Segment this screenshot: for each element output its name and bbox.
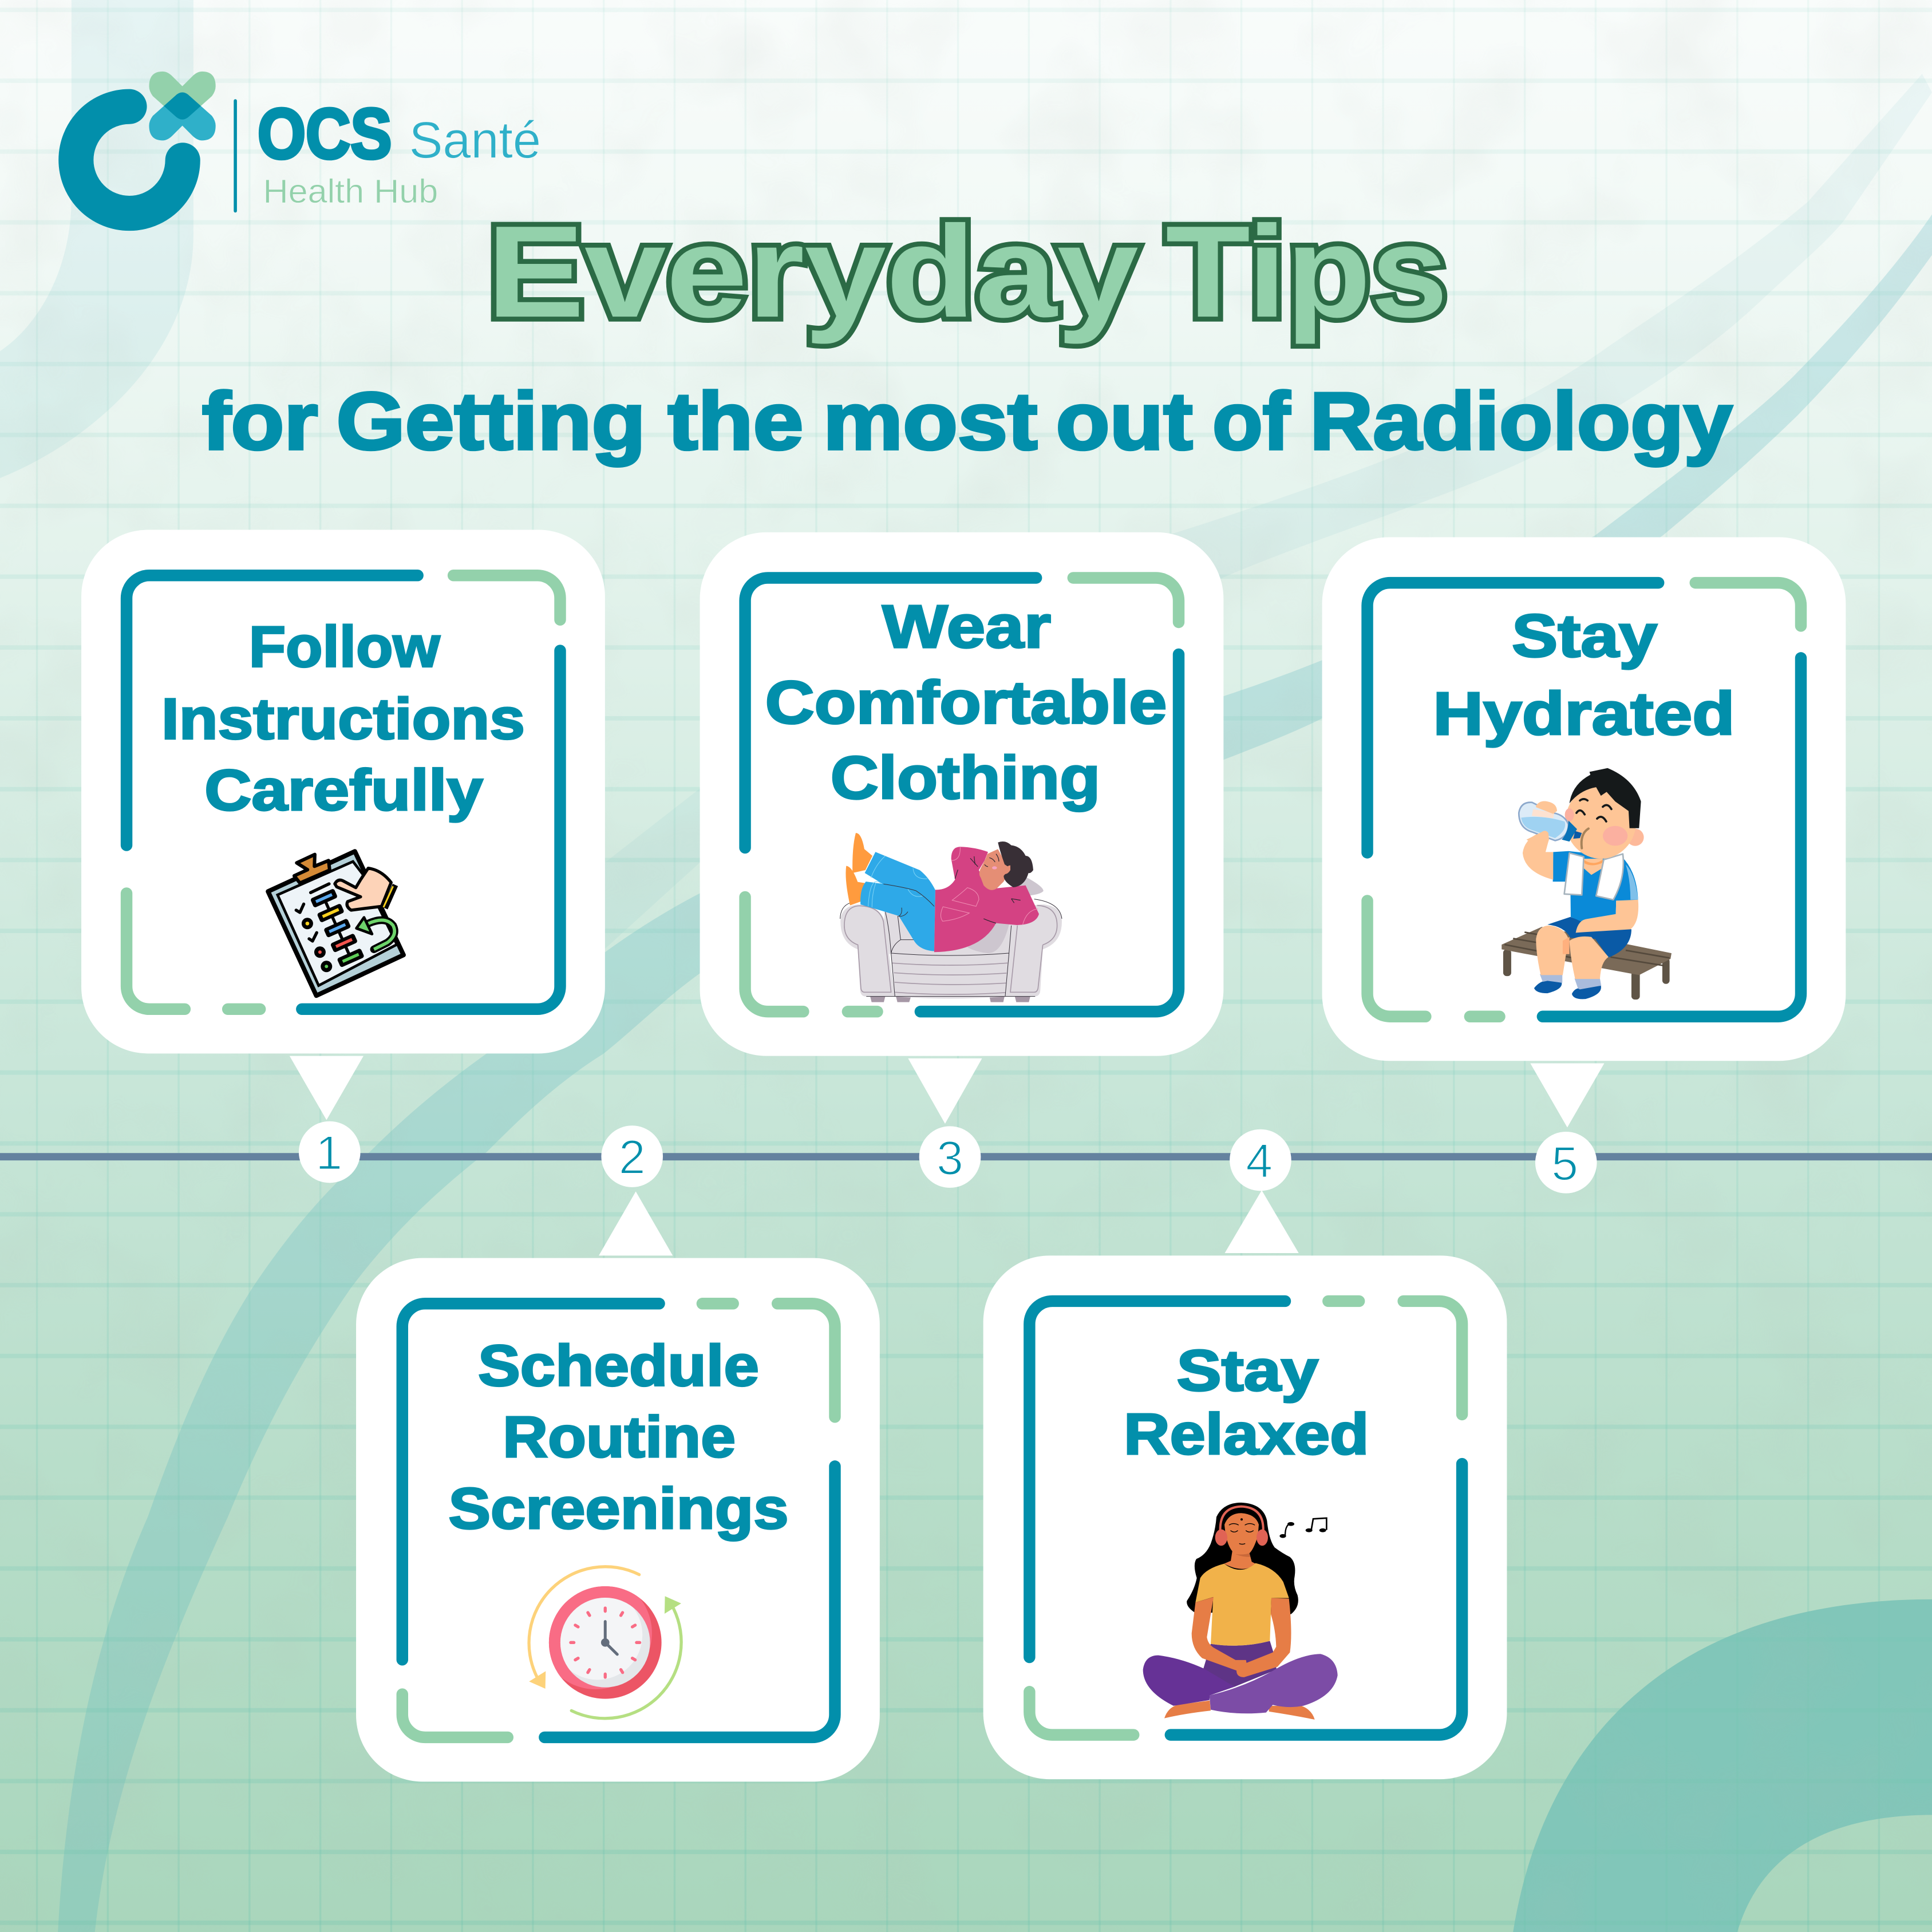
icon: clipboard with hand <box>268 851 404 995</box>
panel: Stay Hydrated <box>1322 537 1846 1061</box>
step marker 3 <box>919 1126 981 1188</box>
timeline line <box>0 1153 1932 1160</box>
card heading: Hydrated <box>1433 681 1735 748</box>
logo mark: cross overlap <box>164 92 201 120</box>
background: light sweeping band <box>605 74 1932 949</box>
subtitle: for Getting the most out of Radiology: for <box>202 376 318 467</box>
icon: woman meditating with headphones <box>1143 1503 1338 1720</box>
step marker 4: 4 <box>1246 1134 1273 1188</box>
background: top-left arc band <box>0 0 193 478</box>
step marker 5 <box>1535 1132 1597 1194</box>
card heading: Wear <box>882 594 1051 661</box>
title: Everyday Tips: Everyday <box>487 199 1139 345</box>
icon: clock with cycle arrows <box>529 1567 681 1718</box>
card heading: Relaxed <box>1124 1402 1369 1467</box>
logo mark: green cross half <box>149 72 216 120</box>
subtitle: for Getting the most out of Radiology: out <box>1056 376 1193 467</box>
card frame <box>127 575 560 1009</box>
logo: OCS Santé Health Hub <box>76 72 541 214</box>
pointer: card 1 <box>290 1056 364 1120</box>
logo text: Health Hub: Health Hub <box>263 173 438 210</box>
step marker 1: 1 <box>315 1126 342 1180</box>
step marker 5: 5 <box>1551 1136 1578 1190</box>
pointer: card 2 <box>599 1191 673 1255</box>
logo text: OCS: OCS <box>258 94 392 174</box>
card frame <box>402 1303 835 1737</box>
pointer: card 4 <box>1225 1190 1299 1253</box>
card heading: Stay <box>1512 603 1657 670</box>
card heading: Carefully <box>204 758 483 823</box>
card heading: Stay <box>1177 1338 1318 1403</box>
subtitle: for Getting the most out of Radiology: of <box>1212 376 1290 467</box>
step marker 3: 3 <box>937 1131 963 1184</box>
pointer: card 3 <box>908 1058 982 1124</box>
card heading: Clothing <box>831 745 1100 812</box>
pointer: card 5 <box>1530 1064 1604 1127</box>
panel: Follow Instructions Carefully <box>81 530 605 1053</box>
logo mark: blue cross half <box>149 92 216 140</box>
card heading: Follow <box>249 614 440 679</box>
card heading <box>765 594 1167 812</box>
step marker 1 <box>299 1121 361 1183</box>
logo divider <box>234 99 237 212</box>
card heading: Schedule <box>478 1333 759 1398</box>
card frame <box>745 578 1179 1012</box>
card frame <box>1368 583 1801 1017</box>
subtitle: for Getting the most out of Radiology: Getting <box>337 376 646 467</box>
card heading: Screenings <box>448 1476 789 1541</box>
step marker 2 <box>601 1125 663 1187</box>
card frame <box>1029 1301 1462 1735</box>
card heading: Routine <box>503 1405 736 1469</box>
title: Everyday Tips <box>487 199 1448 345</box>
logo text: Santé: Santé <box>409 112 541 169</box>
card heading: Instructions <box>161 686 525 751</box>
subtitle: for Getting the most out of Radiology: Radiology <box>1310 376 1732 467</box>
subtitle: for Getting the most out of Radiology <box>202 376 1732 467</box>
background: bottom-right ring <box>1513 1599 1932 1932</box>
card heading: Comfortable <box>765 669 1167 736</box>
card heading <box>1433 603 1735 748</box>
panel: Wear Comfortable Clothing <box>700 532 1223 1056</box>
title: Everyday Tips: Tips <box>1165 199 1448 345</box>
subtitle: for Getting the most out of Radiology: most <box>823 376 1037 467</box>
card heading <box>1124 1338 1369 1467</box>
logo mark: C ring <box>76 106 183 214</box>
step marker 4 <box>1230 1129 1291 1191</box>
icon: person lounging on armchair <box>840 833 1062 1002</box>
subtitle: for Getting the most out of Radiology: the <box>668 376 803 467</box>
card heading <box>448 1333 789 1541</box>
icon: boy drinking water on bench <box>1502 768 1672 999</box>
panel: Schedule Routine Screenings <box>356 1258 880 1781</box>
step marker 2: 2 <box>619 1130 646 1184</box>
panel: Stay Relaxed <box>983 1255 1507 1779</box>
card heading <box>161 614 525 823</box>
